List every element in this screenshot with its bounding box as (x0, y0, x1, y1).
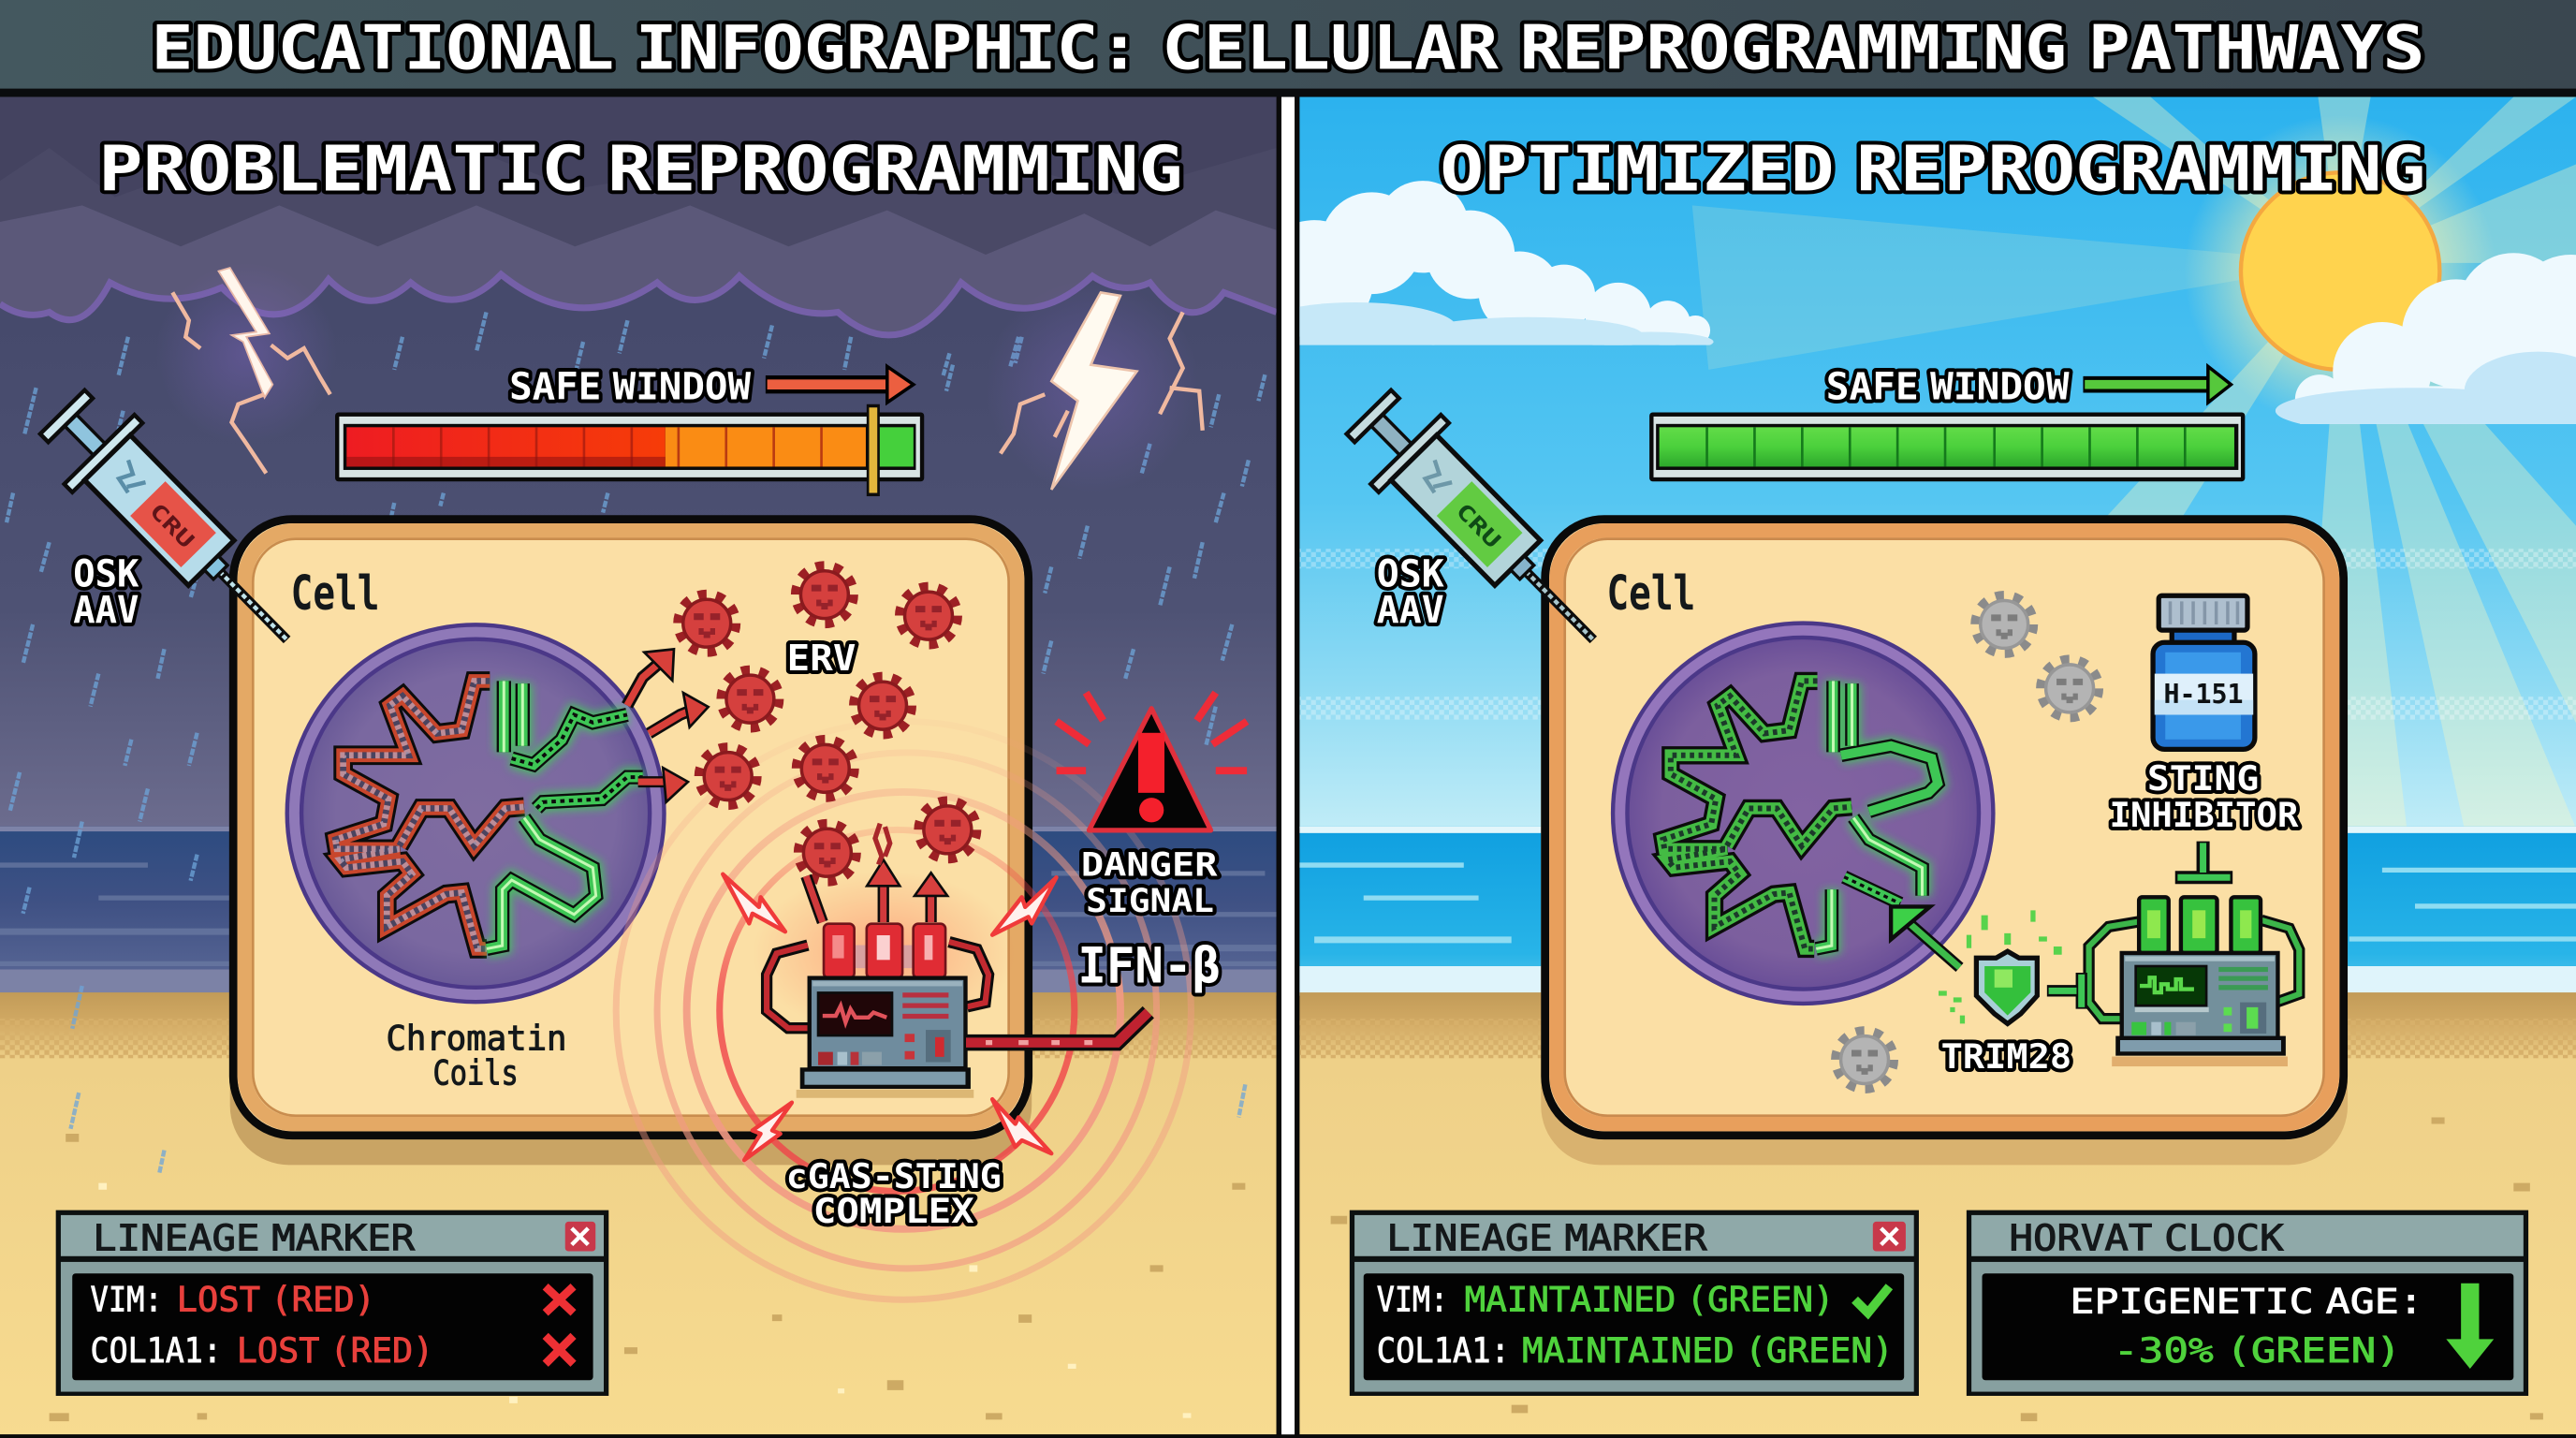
chromatin coils all green (1663, 681, 1938, 948)
lineage marker window: maintained: MAINTAINED (GREEN) (1522, 1330, 1894, 1371)
OSK AAV label: AAV (73, 588, 139, 632)
safe window label with arrow (1826, 364, 2231, 408)
stormy sky (0, 279, 1277, 827)
cGAS-STING complex label: COMPLEX (813, 1191, 974, 1231)
up arrows (806, 876, 931, 922)
safe window label with arrow (509, 364, 914, 408)
pods (2139, 897, 2169, 953)
syringe: OSK AAV green (1334, 377, 1629, 674)
cell label: Cell (291, 566, 379, 622)
lineage marker window: maintained: COL1A1: (1377, 1330, 1510, 1371)
storm clouds (0, 97, 1277, 335)
horvat clock window: EPIGENETIC AGE: (2070, 1281, 2423, 1321)
nucleus with chromatin (1611, 621, 1996, 1005)
sand (1299, 992, 2576, 1438)
horvat clock window: -30% (GREEN) (2114, 1330, 2401, 1371)
danger signal label (1081, 845, 1219, 920)
green down arrow (2446, 1284, 2494, 1369)
green specks (1939, 910, 2062, 1023)
lineage marker window: lost (56, 1211, 608, 1396)
heading: problematic: PROBLEMATIC REPROGRAMMING (98, 133, 1183, 206)
title: EDUCATIONAL INFOGRAPHIC: CELLULAR REPROGRAMMING PATHWAYS (151, 14, 2425, 84)
close button (565, 1222, 595, 1252)
divider (1277, 97, 1299, 1438)
inert grey virus particles (1837, 596, 2098, 1088)
cell label: Cell (1606, 566, 1695, 622)
green arrow to chromatin (1891, 906, 1959, 967)
safe window label with arrow: SAFE WINDOW (509, 364, 752, 408)
danger signal label: SIGNAL (1086, 882, 1214, 920)
OSK AAV label: OSK (1377, 552, 1444, 596)
danger signal label: DANGER (1081, 845, 1219, 884)
pods (856, 946, 865, 968)
lightning right (999, 291, 1205, 491)
cell (230, 520, 1032, 1165)
lineage marker window: lost: COL1A1: (91, 1330, 222, 1371)
ocean (0, 827, 1277, 996)
case (810, 978, 965, 1068)
OSK AAV label (73, 552, 139, 632)
cGAS-STING machine green (2089, 897, 2299, 1066)
safe window label with arrow: SAFE WINDOW (1826, 364, 2070, 408)
bottom edge (0, 1434, 2576, 1438)
close button (1873, 1222, 1906, 1252)
rain (7, 312, 1265, 1173)
panel: problematic reprogramming (0, 97, 1277, 1438)
sand (0, 992, 1277, 1438)
tubes (767, 942, 988, 1028)
inhibition bar to machine (2175, 842, 2232, 877)
OSK AAV label: OSK (73, 552, 139, 596)
trim28 shield (1939, 910, 2062, 1023)
red glow behind complex (773, 885, 994, 1004)
red X marks (546, 1286, 574, 1364)
H-151 bottle: H-151 (2163, 679, 2244, 710)
horvat clock window (1967, 1211, 2528, 1396)
red arrows from chromatin (627, 649, 709, 802)
chromatin coils label: Chromatin (386, 1019, 567, 1059)
chromatin coils label: Coils (432, 1052, 519, 1093)
tubes (2089, 920, 2299, 1019)
OSK AAV label: AAV (1377, 588, 1444, 632)
danger warning triangle (1057, 693, 1247, 830)
cGAS-STING machine red (767, 824, 988, 1098)
trim28 label: TRIM28 (1941, 1036, 2071, 1077)
cell (1541, 520, 2348, 1165)
lineage marker window: maintained: MAINTAINED (GREEN) (1465, 1280, 1835, 1320)
dither strips (1299, 549, 2576, 720)
safe window progress bar (1649, 413, 2245, 481)
trim28 inhibition connector (2047, 973, 2082, 1009)
lineage marker window: maintained (1350, 1211, 1919, 1396)
cloud right (2276, 253, 2576, 433)
lineage marker window: lost: LOST (RED) (237, 1330, 433, 1371)
ocean (1299, 827, 2576, 996)
horvat clock window: HORVAT CLOCK (2009, 1218, 2284, 1260)
chromatin coils label (388, 1023, 564, 1086)
lineage marker window: maintained: VIM: (1377, 1280, 1448, 1320)
lineage marker window: lost: LINEAGE MARKER (93, 1218, 416, 1260)
case (2122, 953, 2277, 1038)
heading: optimized: OPTIMIZED REPROGRAMMING (1440, 133, 2425, 206)
syringe: OSK AAV red (37, 388, 290, 644)
erv virus particles (679, 566, 975, 881)
cGAS-STING complex label (786, 1156, 1002, 1231)
cGAS-STING complex label: cGAS-STING (786, 1156, 1002, 1196)
sparks (723, 874, 1057, 1160)
erv label: ERV (787, 638, 856, 680)
danger ripple rings (616, 721, 1191, 1299)
green check mark (1855, 1286, 1889, 1313)
lineage marker window: lost: LOST (RED) (177, 1280, 375, 1320)
cable to IFN-β (966, 1012, 1149, 1043)
panel: optimized reprogramming (1253, 97, 2576, 1438)
IFN-beta label: IFN-β (1077, 938, 1221, 995)
sun (2184, 115, 2496, 427)
chromatin coils (335, 681, 643, 948)
OSK AAV label (1377, 552, 1444, 632)
lightning left (170, 267, 332, 475)
nucleus with chromatin (285, 623, 666, 1004)
STING inhibitor label: STING (2147, 758, 2259, 799)
STING inhibitor label (2110, 758, 2299, 835)
H-151 bottle (2153, 595, 2255, 749)
safe window progress bar (335, 404, 924, 496)
lineage marker window: lost: VIM: (91, 1280, 163, 1320)
sun rays (1692, 97, 2576, 829)
title bar (0, 0, 2576, 97)
syringe: OSK AAV red: CRU (144, 499, 198, 553)
sunny sky (1299, 97, 2576, 829)
STING inhibitor label: INHIBITOR (2110, 795, 2299, 835)
lineage marker window: maintained: LINEAGE MARKER (1386, 1218, 1707, 1260)
syringe: OSK AAV green: CRU (1451, 499, 1505, 553)
cloud left (1253, 181, 1714, 355)
